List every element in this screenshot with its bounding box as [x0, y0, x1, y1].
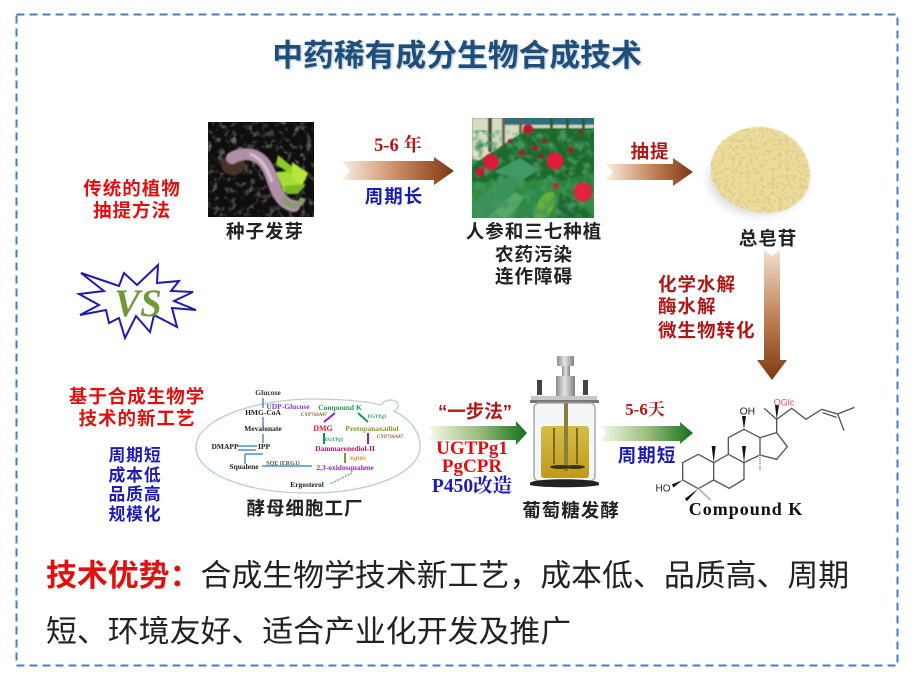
- VS starburst: VS: [114, 282, 162, 325]
- pathway labels: PgDDS: [350, 457, 366, 462]
- label: traditional plant extraction method: [83, 178, 181, 221]
- label: seed germination: 种子发芽: [226, 221, 304, 242]
- label: long cycle: 周期长: [365, 186, 423, 207]
- pathway labels: 2,3-oxidosqualene: [316, 463, 374, 472]
- label: advantages list: 规模化: [108, 504, 162, 524]
- pathway labels: HMG-CoA: [245, 408, 281, 417]
- label: conversion methods: 化学水解: [658, 274, 736, 295]
- pathway labels: Glucose: [255, 388, 281, 397]
- pathway labels: IPP: [258, 442, 270, 451]
- label: traditional plant extraction method: 抽提方法: [93, 200, 171, 221]
- label: compound K: Compound K: [689, 499, 803, 519]
- pathway labels: [211, 388, 404, 489]
- label: engineered genes: P450改造: [432, 475, 512, 497]
- arrow: fermenter to compound K: [601, 422, 693, 444]
- pathway labels: Mevalonate: [244, 424, 282, 433]
- pathway labels: Ergosterol: [290, 480, 324, 489]
- label: engineered genes: PgCPR: [442, 456, 502, 477]
- pathway labels: UGTPg1: [325, 438, 344, 443]
- label: planting problems: 农药污染: [495, 244, 573, 265]
- label: yeast cell factory: 酵母细胞工厂: [246, 498, 364, 519]
- photo: total saponin powder: [705, 122, 815, 217]
- label: planting problems: 连作障碍: [495, 266, 573, 287]
- pathway labels: Dammarenediol-II: [315, 444, 375, 453]
- arrow: plant to saponin: [606, 158, 693, 186]
- label: new synthetic biology process: [69, 386, 205, 429]
- label: planting problems: 人参和三七种植: [466, 221, 602, 242]
- pathway labels: SQE (ERG1): [266, 460, 300, 467]
- molecule: compound K structure: HO: [656, 484, 671, 495]
- summary: technical advantages: 短、环境友好、适合产业化开发及推广: [46, 614, 571, 649]
- label: conversion methods: [658, 274, 756, 341]
- summary: technical advantages: 技术优势：合成生物学技术新工艺，成本低、品质高、周期: [46, 558, 849, 593]
- label: one step method: “一步法”: [438, 401, 512, 422]
- label: engineered genes: UGTPg1: [436, 438, 508, 459]
- label: total saponins: 总皂苷: [739, 228, 797, 249]
- label: new synthetic biology process: 技术的新工艺: [78, 408, 196, 429]
- pathway labels: UGTPg1: [368, 415, 387, 420]
- pathway labels: Compound K: [318, 403, 362, 412]
- yeast cell outline: [196, 399, 420, 493]
- pathway labels: DMAPP: [211, 442, 239, 451]
- label: short cycle: 周期短: [618, 445, 676, 466]
- label: traditional plant extraction method: 传统的植物: [83, 178, 181, 199]
- label: conversion methods: 微生物转化: [658, 320, 756, 341]
- label: planting problems: [466, 221, 602, 287]
- icon: bioreactor: [530, 356, 599, 487]
- arrow: yeast to fermenter: [429, 421, 527, 445]
- label: 5-6 days: 5-6天: [625, 400, 665, 419]
- summary: technical advantages: [46, 558, 849, 649]
- pathway labels: Protopanaxadiol: [345, 424, 399, 433]
- photo: ginseng and notoginseng planting: [472, 118, 594, 218]
- label: advantages list: [108, 446, 162, 524]
- label: extraction: 抽提: [630, 141, 670, 162]
- label: conversion methods: 酶水解: [658, 296, 717, 317]
- molecule: compound K structure: OGlc: [774, 397, 795, 407]
- arrow: saponin down to compound K: [757, 250, 787, 380]
- VS starburst: [79, 265, 196, 338]
- photo: seed germination: [208, 122, 314, 217]
- label: engineered genes: [432, 438, 512, 497]
- label: advantages list: 周期短: [108, 446, 162, 465]
- pathway labels: CYP716A47: [301, 413, 328, 418]
- pathway arrows: [238, 398, 368, 484]
- pathway labels: UDP-Glucose: [266, 402, 310, 411]
- pathway labels: DMG: [313, 424, 333, 433]
- label: 5-6 years: 5-6 年: [374, 134, 422, 156]
- yeast cell factory pathway: [196, 388, 420, 493]
- label: new synthetic biology process: 基于合成生物学: [69, 386, 205, 407]
- title: 中药稀有成分生物合成技术: [272, 38, 642, 73]
- label: glucose fermentation: 葡萄糖发酵: [522, 500, 620, 521]
- label: advantages list: 成本低: [108, 465, 162, 485]
- molecule: compound K structure: [656, 397, 854, 501]
- pathway labels: CYP716A47: [377, 435, 404, 440]
- arrow: seed to plant: [342, 157, 454, 185]
- label: advantages list: 品质高: [108, 484, 162, 504]
- pathway labels: Squalene: [229, 462, 259, 471]
- molecule: compound K structure: OH: [740, 407, 755, 418]
